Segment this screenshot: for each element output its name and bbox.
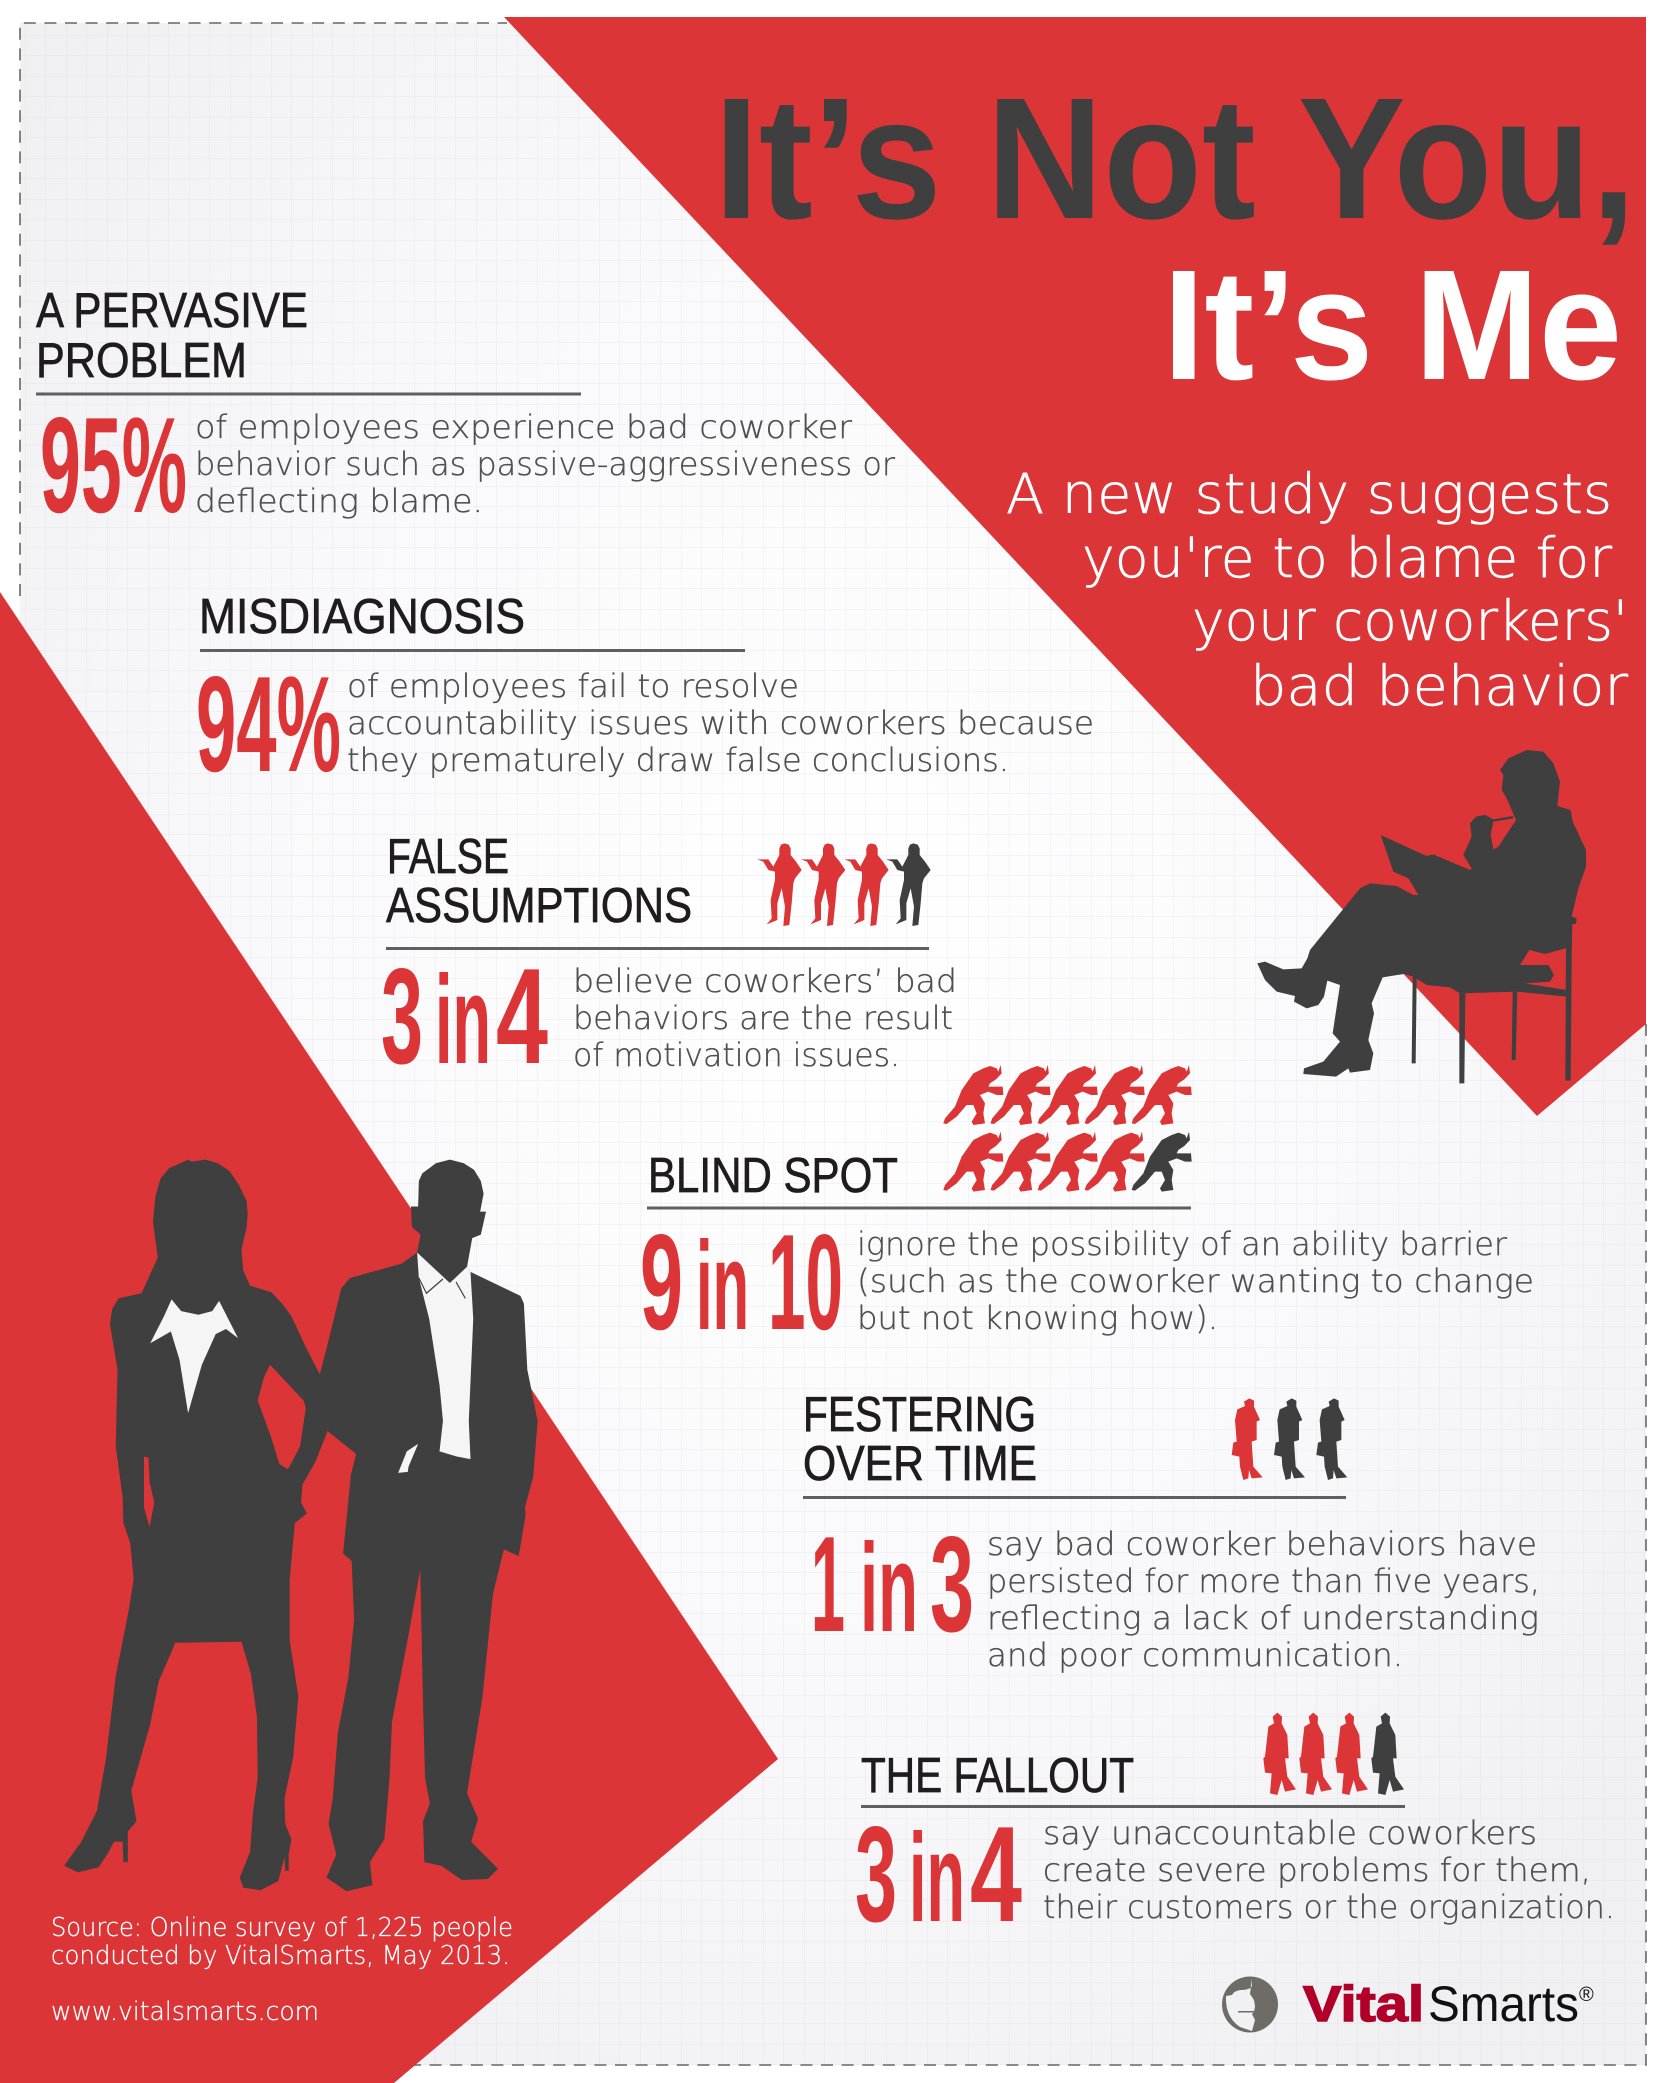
icon row: men on phones: [1232, 1398, 1347, 1480]
body text: of employees experience bad coworker: [195, 408, 853, 446]
body text: behaviors are the result: [573, 999, 953, 1037]
section: blind spot: 10: [768, 1206, 843, 1358]
body text: accountability issues with coworkers because: [347, 704, 1094, 742]
heading: BLIND SPOT: [648, 1149, 898, 1203]
heading: OVER TIME: [803, 1437, 1037, 1491]
body text: (such as the coworker wanting to change: [857, 1262, 1534, 1300]
stat: 1 in 3: 3: [930, 1508, 974, 1660]
stat: 3 in 4: 4: [970, 1798, 1022, 1950]
body text: they prematurely draw false conclusions.: [347, 741, 1009, 779]
section: a pervasive problem: [36, 284, 896, 541]
body text: believe coworkers’ bad: [573, 962, 957, 1000]
body text: behavior such as passive-aggressiveness or: [195, 445, 896, 483]
body text: [347, 667, 1094, 779]
wordmark: Vital: [1303, 1976, 1424, 2032]
body text: say unaccountable coworkers: [1043, 1814, 1537, 1852]
heading: ASSUMPTIONS: [386, 879, 692, 933]
heading: [386, 830, 692, 933]
subtitle: [1006, 462, 1628, 718]
stat: 9 in 10: 9: [640, 1206, 683, 1358]
stat: 94%: 94%: [196, 648, 341, 800]
icon row: walking men: [1263, 1713, 1404, 1795]
stat: 1 in 3: [811, 1508, 974, 1660]
stat: 95%: 95%: [40, 389, 187, 541]
icon rows: pushing men: [943, 1065, 1192, 1192]
heading: [36, 284, 308, 388]
icon: face in circle: [1222, 1976, 1278, 2032]
body text: deflecting blame.: [195, 482, 483, 520]
stat: 1 in 3: 1: [811, 1508, 845, 1660]
subtitle: A new study suggests: [1006, 462, 1612, 526]
stat: 9 in 10: in: [696, 1217, 749, 1356]
subtitle: you're to blame for: [1082, 526, 1612, 590]
stat: 3 in 4: [855, 1798, 1022, 1950]
source note: conducted by VitalSmarts, May 2013.: [51, 1941, 510, 1971]
icon row: women: [757, 843, 931, 926]
stat: 9 in 10: [640, 1206, 843, 1358]
section: blind spot: [640, 1065, 1534, 1358]
body text: say bad coworker behaviors have: [987, 1525, 1537, 1563]
body text: [987, 1525, 1540, 1674]
stat: 3 in 4: 3: [855, 1798, 897, 1950]
source note: [51, 1913, 513, 1971]
body text: persisted for more than five years,: [987, 1562, 1540, 1600]
businessman: [320, 1160, 538, 1891]
red banner: top right: [504, 17, 1646, 1116]
heading: A PERVASIVE: [36, 284, 308, 338]
body text: and poor communication.: [987, 1636, 1403, 1674]
body text: reflecting a lack of understanding: [987, 1599, 1539, 1637]
subtitle: your coworkers': [1192, 589, 1628, 653]
businesswoman: [64, 1160, 328, 1890]
heading: [803, 1388, 1037, 1491]
heading: PROBLEM: [36, 334, 247, 388]
section: the fallout: [855, 1713, 1615, 1950]
stat: 3 in 4: [381, 940, 548, 1092]
body text: their customers or the organization.: [1043, 1888, 1615, 1926]
body text: create severe problems for them,: [1043, 1851, 1591, 1889]
VitalSmarts logo: [1222, 1976, 1594, 2032]
body text: of employees fail to resolve: [347, 667, 799, 705]
website url: www.vitalsmarts.com: [51, 1997, 319, 2027]
silhouette: businesswoman and businessman: [64, 1160, 538, 1891]
heading: MISDIAGNOSIS: [199, 590, 525, 644]
wordmark: Smarts: [1428, 1976, 1579, 2032]
wordmark: [1303, 1976, 1594, 2032]
stat: 3 in 4: 3: [381, 940, 423, 1092]
stat: 1 in 3: in: [860, 1519, 918, 1658]
body text: ignore the possibility of an ability barrier: [857, 1225, 1508, 1263]
heading: FESTERING: [803, 1388, 1036, 1442]
heading: THE FALLOUT: [861, 1749, 1134, 1803]
body text: [195, 408, 896, 520]
title: [714, 61, 1636, 413]
section: misdiagnosis: [196, 590, 1094, 800]
wordmark: ®: [1579, 1984, 1594, 2006]
stat: 3 in 4: in: [435, 951, 491, 1090]
section: festering over time: [803, 1388, 1540, 1674]
body text: [573, 962, 957, 1074]
body text: [857, 1225, 1534, 1337]
heading: FALSE: [387, 830, 509, 884]
section: false assumptions: [381, 830, 957, 1092]
body text: [1043, 1814, 1615, 1926]
title: It’s Me: [1163, 238, 1622, 413]
source note: Source: Online survey of 1,225 people: [51, 1913, 513, 1943]
body text: but not knowing how).: [857, 1299, 1218, 1337]
stat: 3 in 4: in: [909, 1809, 965, 1948]
stat: 3 in 4: 4: [496, 940, 548, 1092]
body text: of motivation issues.: [573, 1036, 900, 1074]
red triangle: bottom left: [0, 592, 778, 2083]
silhouette: seated man on chair: [1257, 750, 1586, 1083]
subtitle: bad behavior: [1250, 654, 1628, 718]
